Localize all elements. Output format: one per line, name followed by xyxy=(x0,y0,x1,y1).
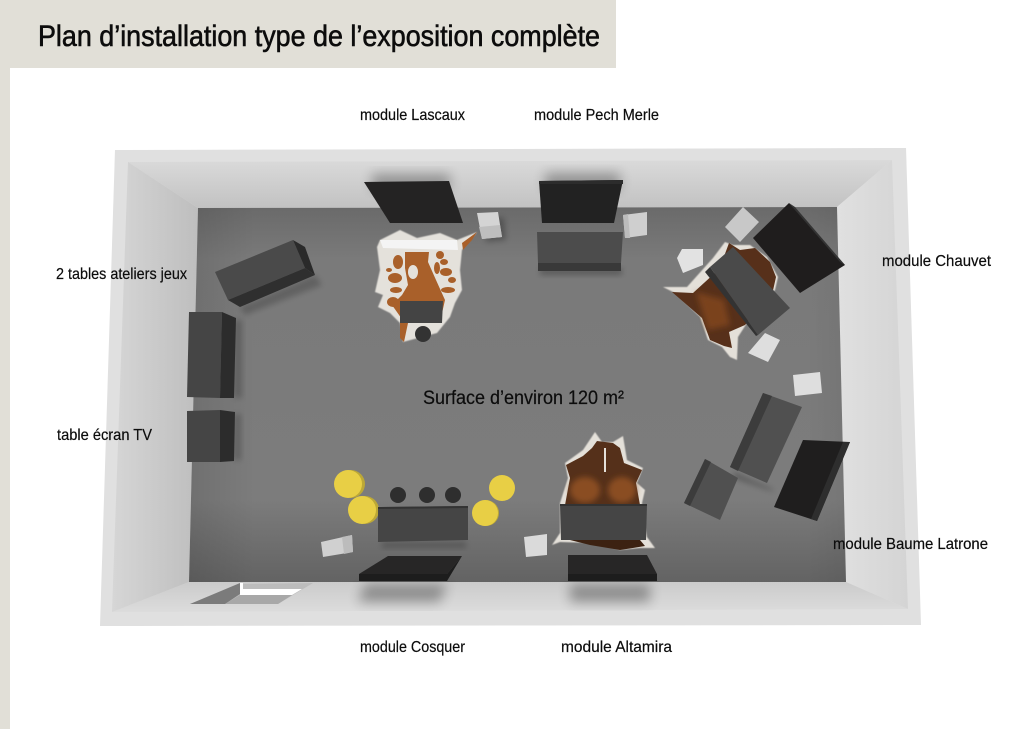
table shadow xyxy=(382,542,466,548)
panel shadow xyxy=(545,173,620,190)
stool xyxy=(415,326,431,342)
label: module Pech Merle: module Pech Merle xyxy=(534,107,659,124)
module Chauvet xyxy=(663,203,845,362)
panel shadow xyxy=(358,584,447,602)
module Cosquer xyxy=(321,470,515,602)
black panel xyxy=(364,181,463,223)
title: Plan d’installation type de l’exposition complète xyxy=(38,20,600,53)
cube bottom xyxy=(748,333,780,362)
yellow seats xyxy=(334,470,515,526)
table xyxy=(378,506,468,542)
table xyxy=(537,232,623,263)
small table xyxy=(400,301,443,323)
cube xyxy=(484,217,506,242)
table B shadow xyxy=(234,320,242,398)
table 1 shadow xyxy=(733,472,775,492)
cube left xyxy=(677,249,703,273)
table B xyxy=(187,312,222,398)
label: module Lascaux: module Lascaux xyxy=(360,107,465,124)
table shadow xyxy=(540,268,622,275)
table 2 xyxy=(684,459,738,520)
table A xyxy=(215,240,305,300)
label: module Chauvet: module Chauvet xyxy=(882,253,992,270)
module Altamira xyxy=(524,432,657,602)
entrance door xyxy=(190,583,313,604)
black panel xyxy=(774,440,850,521)
2 tables ateliers jeux furniture xyxy=(187,240,322,398)
cube xyxy=(321,535,353,557)
room walls and floor xyxy=(100,148,921,626)
black panel xyxy=(568,555,657,574)
cowhide brown xyxy=(565,441,642,505)
cowhide white xyxy=(375,230,477,342)
module Lascaux xyxy=(364,174,506,342)
cube xyxy=(793,372,822,396)
cube xyxy=(623,212,647,238)
cowhide spots xyxy=(386,232,477,342)
panel shadow xyxy=(570,584,650,602)
label: module Cosquer: module Cosquer xyxy=(360,639,466,656)
label: table ecran TV: table écran TV xyxy=(57,427,152,444)
cowhide white xyxy=(552,432,655,550)
black panel xyxy=(539,180,623,223)
black panel xyxy=(753,203,845,293)
stools xyxy=(390,487,461,503)
table xyxy=(710,247,790,335)
white table edge xyxy=(380,240,458,250)
label: module Altamira: module Altamira xyxy=(561,639,672,656)
table shadow xyxy=(240,275,322,315)
cube xyxy=(524,534,547,557)
table 1 xyxy=(730,393,802,483)
module Pech Merle xyxy=(537,173,647,275)
label: module Baume Latrone: module Baume Latrone xyxy=(833,536,988,553)
black panel xyxy=(359,556,462,574)
cowhide brown xyxy=(672,243,776,348)
table ecran TV furniture xyxy=(187,410,241,462)
cowhide white xyxy=(663,242,778,360)
module Baume Latrone xyxy=(684,372,850,521)
cube top xyxy=(725,207,759,242)
label: 2 tables ateliers jeux: 2 tables ateliers jeux xyxy=(56,266,187,283)
table xyxy=(560,504,647,540)
panel shadow xyxy=(372,174,450,190)
label: surface: Surface d’environ 120 m² xyxy=(423,388,624,409)
page background accents xyxy=(0,0,616,729)
